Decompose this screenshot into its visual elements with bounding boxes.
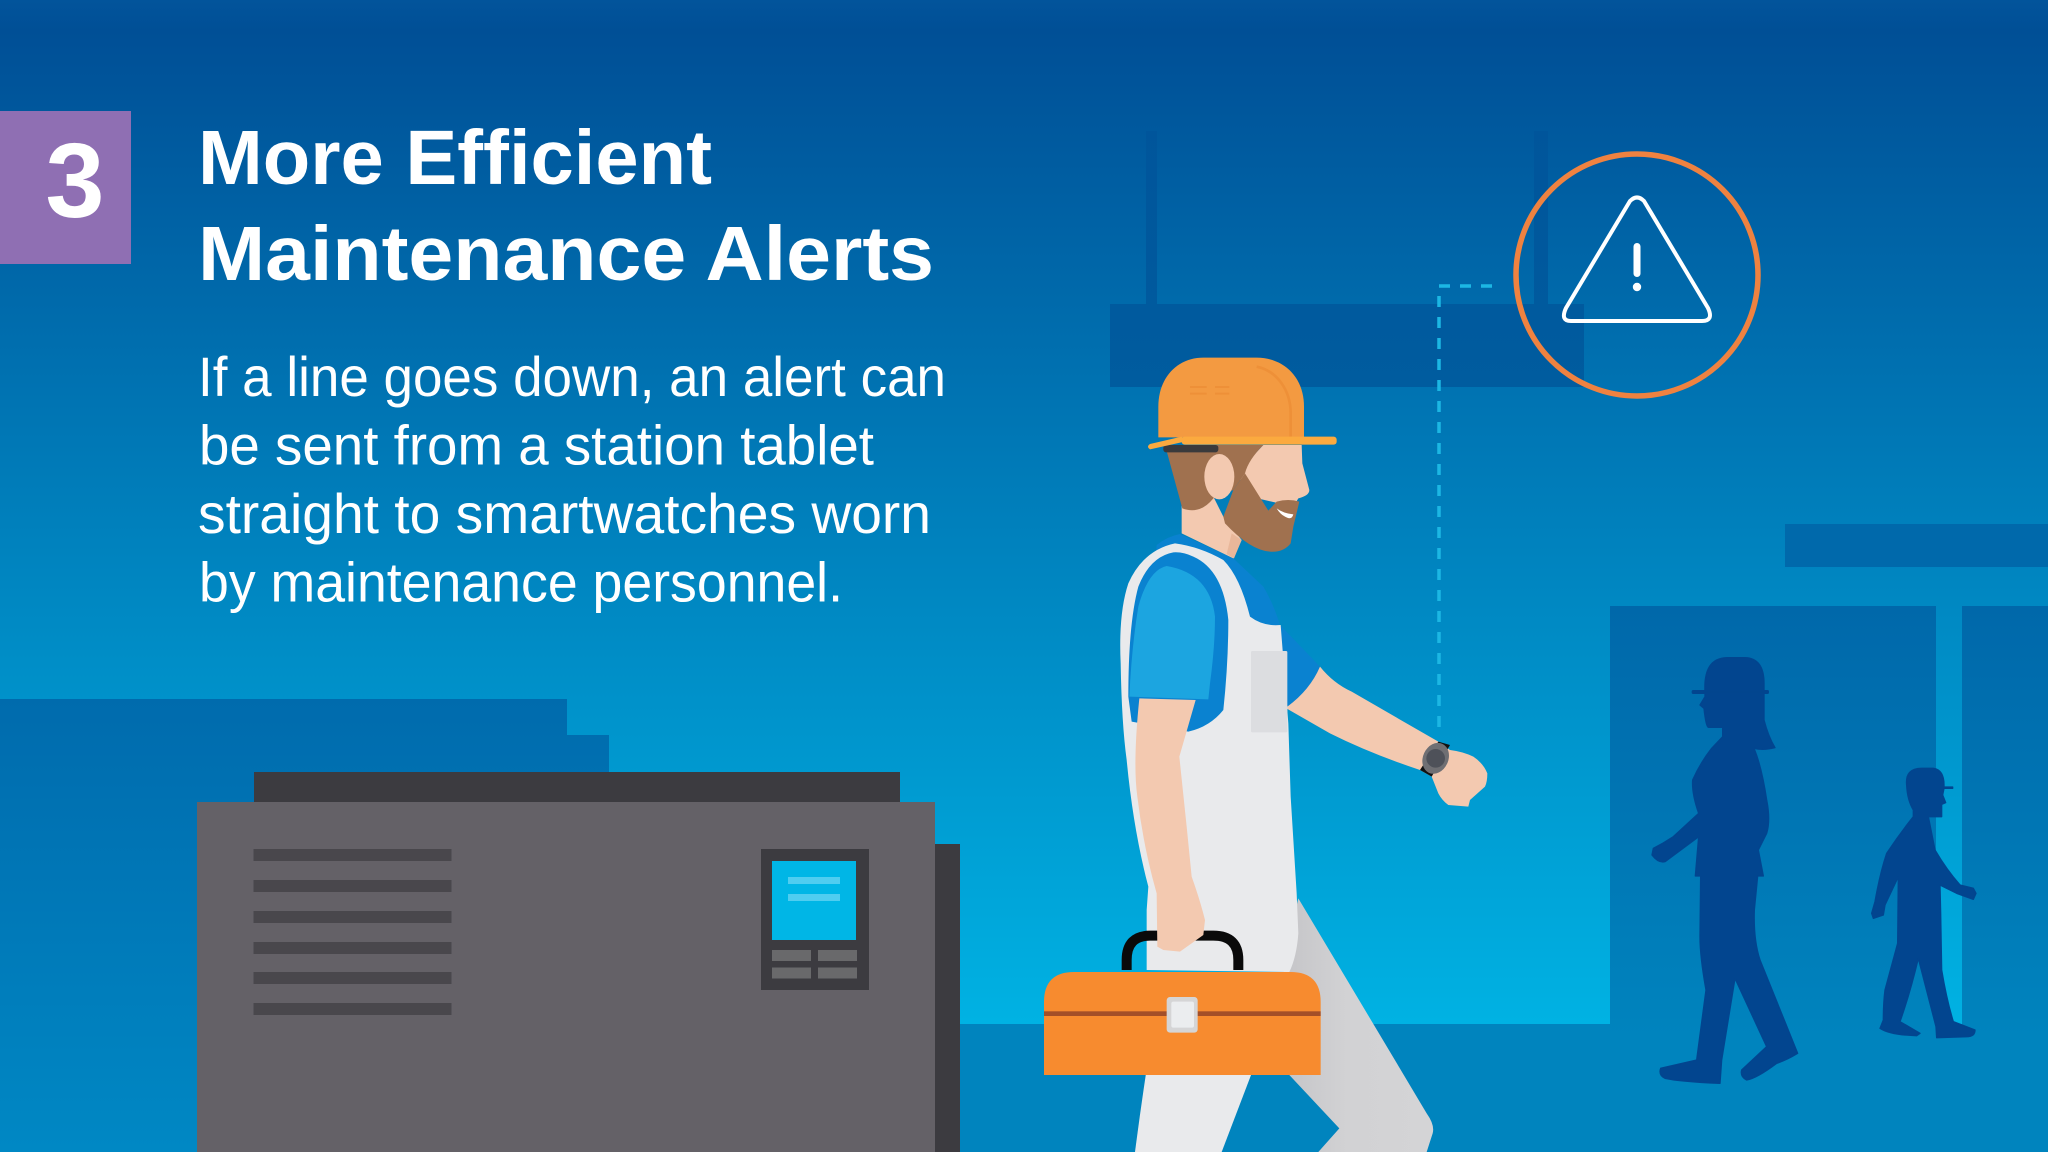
body text: If a line goes down, an alert can — [198, 345, 946, 408]
neck — [1182, 497, 1242, 558]
silhouette workers — [1652, 658, 1976, 1083]
background block upper right — [1785, 524, 2048, 567]
number badge: 3 — [46, 122, 104, 240]
machine top — [254, 772, 900, 803]
overalls — [1120, 543, 1298, 972]
hair — [1165, 445, 1263, 510]
title — [198, 115, 934, 297]
rear leg — [1283, 898, 1433, 1152]
smile — [1277, 508, 1293, 518]
lower front leg — [1135, 1073, 1252, 1152]
exclamation mark — [1633, 243, 1641, 291]
alert icon — [1516, 154, 1758, 396]
floor — [0, 1024, 2048, 1152]
sleeve — [1129, 566, 1215, 699]
silhouette woman — [1652, 658, 1798, 1083]
warning triangle — [1564, 198, 1710, 321]
dashed connector from watch to alert — [1439, 286, 1497, 727]
machine body — [197, 802, 935, 1152]
machine vents — [254, 849, 452, 1015]
forward arm with hand — [1283, 667, 1487, 807]
beard — [1223, 473, 1299, 552]
main worker — [1044, 358, 1487, 1152]
toolbox — [1044, 972, 1321, 1075]
toolbox handle — [1127, 936, 1238, 970]
title: Maintenance Alerts — [198, 211, 934, 297]
machine side — [934, 844, 960, 1152]
body text: be sent from a station tablet — [199, 414, 874, 476]
hanging arm and hand — [1135, 698, 1205, 952]
face — [1237, 445, 1309, 507]
number badge — [0, 111, 131, 264]
hard hat — [1148, 358, 1337, 452]
machine — [197, 772, 960, 1152]
background building blocks left — [0, 699, 609, 1152]
body text: straight to smartwatches worn — [198, 482, 931, 545]
ear — [1204, 454, 1234, 499]
ceiling fixture — [1110, 131, 1584, 387]
silhouette man — [1872, 768, 1976, 1038]
body text: by maintenance personnel. — [199, 550, 843, 614]
armhole — [1128, 552, 1228, 732]
smartwatch — [1417, 738, 1454, 778]
background building right — [1610, 606, 2048, 1152]
title: More Efficient — [198, 115, 712, 201]
overalls pocket — [1251, 651, 1287, 732]
station tablet — [761, 849, 869, 990]
alert ring — [1516, 154, 1758, 396]
shirt — [1150, 534, 1320, 707]
body text — [198, 345, 946, 614]
